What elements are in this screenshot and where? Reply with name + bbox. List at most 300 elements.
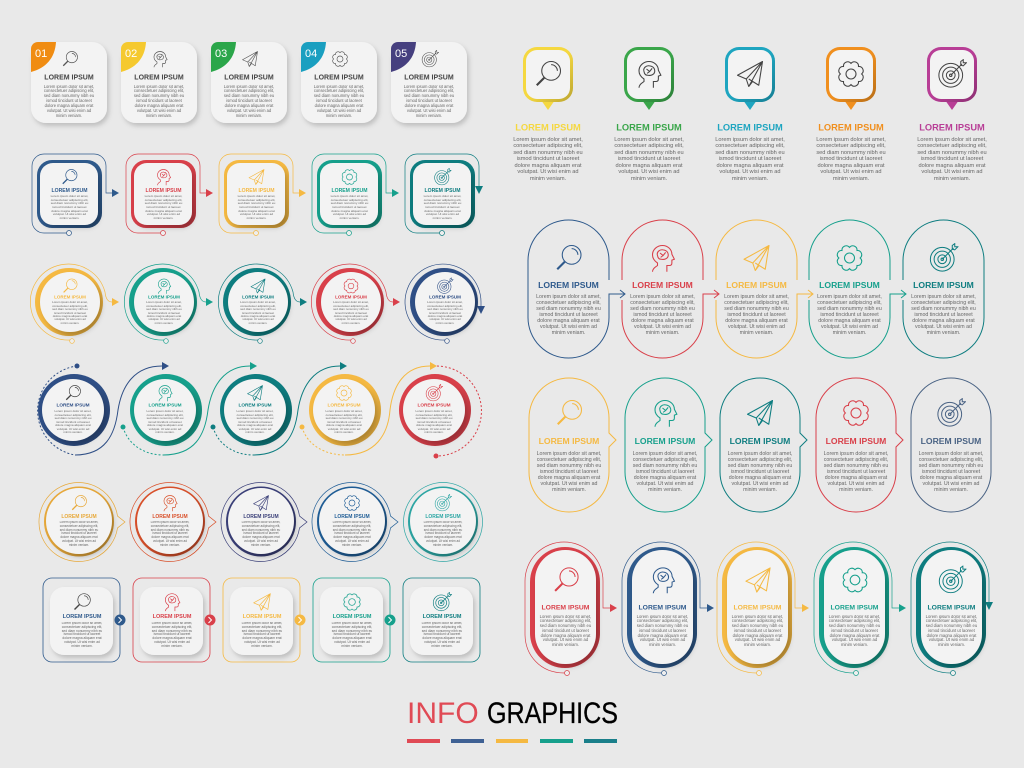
text block: minim veniam. [552,487,586,493]
heading: LOREM IPSUM [425,188,460,194]
icon: gear [337,386,351,400]
text block [389,85,469,121]
text block: ismod tincidunt ut laoreet [820,312,879,318]
text block: sed diam nonummy nibh eu [614,150,684,156]
text block: ismod tincidunt ut laoreet [827,469,885,475]
step 3 indigo [221,483,307,562]
text block: sed diam nonummy nibh eu [926,623,977,628]
icon: paper plane [748,400,772,426]
icon: paper plane [738,62,762,86]
text block: sed diam nonummy nibh eu [55,416,91,420]
text block: consectetuer adipiscing elit, [630,300,695,306]
text block: consectetuer adipiscing elit, [724,300,789,306]
text block: dolore magna aliquam erat [55,423,91,427]
number tab 02: 02 [125,48,137,60]
text block: sed diam nonummy nibh eu [145,201,182,205]
step 4 teal [313,578,396,662]
text block: dolore magna aliquam erat [514,163,582,169]
icon: head [639,62,661,88]
text block: sed diam nonummy nibh eu [422,629,462,633]
text block [228,301,288,326]
text block: dolore magna aliquam erat [424,535,462,539]
text block: consectetuer adipiscing elit, [513,143,583,149]
right row 3: capsules with pointers [529,378,991,512]
text block: Lorem ipsum dolor sit amet, [630,294,695,300]
text block: dolore magna aliquam erat [334,314,368,318]
text block: volutpat. Ut wisi enim ad [244,539,278,543]
text block: sed diam nonummy nibh eu [724,306,789,312]
step 3 yellow [223,578,306,662]
step 5 navy [405,264,485,343]
text block: minim veniam. [69,543,89,547]
text block: ismod tincidunt ut laoreet [327,420,361,424]
text block [911,451,991,495]
text block [415,301,475,326]
icon: magnifier [72,496,86,510]
text block: dolore magna aliquam erat [333,535,371,539]
text block [134,195,194,221]
text block: consectetuer adipiscing elit, [427,304,463,308]
step 2 red [126,154,213,236]
text block [604,137,694,185]
row 4: circles linked by S-curves [38,362,481,458]
text block: minim veniam. [251,644,273,648]
text block: consectetuer adipiscing elit, [326,413,362,417]
text block [413,521,473,549]
step 1 yellow [30,264,119,343]
right row 4: filled capsules with arrows [525,542,993,676]
text block: ismod tincidunt ut laoreet [928,628,975,633]
heading: LOREM IPSUM [148,295,180,300]
step 2 teal [120,362,257,455]
text block: minim veniam. [245,430,265,434]
text block: Lorem ipsum dolor sit amet, [536,294,601,300]
heading: LOREM IPSUM [56,403,90,408]
text block: sed diam nonummy nibh eu [817,306,882,312]
text block: ismod tincidunt ut laoreet [429,311,461,315]
step 3 dark teal [210,362,347,455]
text block: dolore magna aliquam erat [152,636,192,640]
text block: Lorem ipsum dolor sit amet, [513,137,583,143]
heading: LOREM IPSUM [429,295,461,300]
step 2 orange [130,483,216,562]
arrow [250,362,257,370]
text block: sed diam nonummy nibh eu [404,93,454,98]
text block [529,451,609,495]
icon: target [930,244,958,271]
text block: dolore magna aliquam erat [830,633,879,638]
text block [816,451,896,495]
text block: volutpat. Ut wisi enim ad [333,212,366,216]
text block [232,622,292,650]
text block: consectetuer adipiscing elit, [817,300,882,306]
card 02 [119,42,199,123]
text block: consectetuer adipiscing elit, [44,88,94,93]
text block: sed diam nonummy nibh eu [917,150,987,156]
step 1 blue [43,578,126,662]
icon: paper plane [242,52,258,66]
icon: magnifier [557,246,581,269]
icon: target [435,168,451,185]
heading: LOREM IPSUM [146,188,181,194]
icon: magnifier [63,52,78,66]
heading: LOREM IPSUM [404,74,454,82]
text block: sed diam nonummy nibh eu [314,93,364,98]
text block: ismod tincidunt ut laoreet [335,311,367,315]
heading: LOREM IPSUM [734,604,782,612]
icon: magnifier [537,62,560,85]
capsule 2 red [622,220,719,358]
text block: dolore magna aliquam erat [638,633,687,638]
text block: ismod tincidunt ut laoreet [148,311,180,315]
text block: consectetuer adipiscing elit, [51,198,88,202]
step 4 yellow [300,362,437,455]
right row 1: icon badges [503,47,997,185]
text block: volutpat. Ut wisi enim ad [407,108,451,113]
step 4 red [311,264,400,343]
text block: volutpat. Ut wisi enim ad [62,539,96,543]
text block: sed diam nonummy nibh eu [224,93,274,98]
step 1 blue [32,154,119,236]
text block: minim veniam. [160,543,180,547]
text block: volutpat. Ut wisi enim ad [915,324,972,330]
text block: minim veniam. [340,216,359,220]
text block: Lorem ipsum dolor sit amet, [614,137,684,143]
text block [625,451,705,495]
text block: ismod tincidunt ut laoreet [332,205,367,209]
badge 2 green [604,47,694,185]
heading: LOREM IPSUM [921,436,981,446]
text block: dolore magna aliquam erat [422,636,462,640]
text block: ismod tincidunt ut laoreet [153,531,187,535]
text block: volutpat. Ut wisi enim ad [239,427,271,431]
text block: dolore magna aliquam erat [927,633,976,638]
text block: volutpat. Ut wisi enim ad [719,169,781,175]
icon: target [433,592,452,611]
heading: LOREM IPSUM [63,614,102,620]
icon: gear [344,594,360,610]
text block: consectetuer adipiscing elit, [242,524,280,528]
text block: minim veniam. [839,487,873,493]
text block: ismod tincidunt ut laoreet [54,311,86,315]
text block: minim veniam. [154,216,173,220]
text block: consectetuer adipiscing elit, [422,625,462,629]
text block: ismod tincidunt ut laoreet [146,205,181,209]
icon: magnifier [558,400,582,424]
arrow [610,604,617,612]
text block [412,195,472,221]
text block: sed diam nonummy nibh eu [919,463,983,469]
text block: sed diam nonummy nibh eu [537,463,601,469]
icon: target [939,566,966,593]
text block: volutpat. Ut wisi enim ad [227,108,271,113]
text block: sed diam nonummy nibh eu [240,307,276,311]
text block: volutpat. Ut wisi enim ad [832,637,877,642]
text block: minim veniam. [334,430,354,434]
step 4 blue [312,483,398,562]
text block: ismod tincidunt ut laoreet [921,156,983,162]
icon: head [653,568,674,593]
icon: head [158,279,171,294]
text block [320,195,380,221]
text block: consectetuer adipiscing elit, [424,524,462,528]
text block: ismod tincidunt ut laoreet [424,632,460,636]
text block: sed diam nonummy nibh eu [816,150,886,156]
text block: sed diam nonummy nibh eu [332,629,372,633]
heading: LOREM IPSUM [831,604,879,612]
text block [142,622,202,650]
text block [716,294,796,338]
text block: volutpat. Ut wisi enim ad [335,539,369,543]
text block: ismod tincidunt ut laoreet [542,628,589,633]
icon: magnifier [74,594,90,610]
title colour bars [407,739,617,743]
text block: sed diam nonummy nibh eu [536,306,601,312]
text block: consectetuer adipiscing elit, [637,618,688,623]
text block: volutpat. Ut wisi enim ad [317,108,361,113]
title [407,697,618,730]
text block: minim veniam. [247,216,266,220]
icon: target [426,384,443,401]
text block: volutpat. Ut wisi enim ad [64,640,100,644]
text block: Lorem ipsum dolor sit amet, [537,451,601,457]
text block [720,451,800,495]
text block: dolore magna aliquam erat [145,209,182,213]
arrow [300,298,307,306]
heading: LOREM IPSUM [152,514,188,520]
text block: sed diam nonummy nibh eu [152,629,192,633]
text block [904,294,984,338]
heading: LOREM IPSUM [417,403,451,408]
icon: magnifier [66,386,80,400]
icon: head [652,246,674,272]
text block: volutpat. Ut wisi enim ad [335,317,367,321]
arrow [112,298,119,306]
text block: dolore magna aliquam erat [416,423,452,427]
text block: consectetuer adipiscing elit, [633,457,697,463]
text block: minim veniam. [433,216,452,220]
icon: head [165,594,180,611]
text block: consectetuer adipiscing elit, [240,304,276,308]
text block: dolore magna aliquam erat [733,633,782,638]
text block: dolore magna aliquam erat [62,636,102,640]
text block: dolore magna aliquam erat [538,475,600,481]
text block: volutpat. Ut wisi enim ad [821,324,878,330]
icon: paper plane [254,496,268,510]
text block: dolore magna aliquam erat [135,103,183,108]
text block: consectetuer adipiscing elit, [333,304,369,308]
heading: LOREM IPSUM [632,280,693,290]
text block: minim veniam. [326,113,352,118]
text block: consectetuer adipiscing elit, [60,524,98,528]
text block: volutpat. Ut wisi enim ad [148,317,180,321]
text block [530,615,600,651]
text block: dolore magna aliquam erat [237,423,273,427]
text block: ismod tincidunt ut laoreet [719,156,781,162]
text block: Lorem ipsum dolor sit amet, [724,294,789,300]
arrow [162,362,169,370]
icon: gear [839,62,863,86]
text block: minim veniam. [833,330,866,336]
chevron button [384,614,396,626]
arrow [707,604,714,612]
heading: LOREM IPSUM [515,122,581,132]
text block: dolore magna aliquam erat [151,535,189,539]
text block: volutpat. Ut wisi enim ad [921,169,983,175]
icon: head [154,52,167,67]
text block: minim veniam. [433,543,453,547]
text block: ismod tincidunt ut laoreet [56,420,90,424]
heading: LOREM IPSUM [726,280,787,290]
text block: dolore magna aliquam erat [331,209,368,213]
title: GRAPHICS [487,697,618,730]
heading: LOREM IPSUM [54,295,86,300]
text block: dolore magna aliquam erat [428,314,462,318]
text block: ismod tincidunt ut laoreet [539,312,598,318]
text block: sed diam nonummy nibh eu [630,306,695,312]
text block: dolore magna aliquam erat [615,163,683,169]
text block: dolore magna aliquam erat [241,314,275,318]
text block: dolore magna aliquam erat [51,209,88,213]
step 5 teal [404,482,482,562]
heading: LOREM IPSUM [153,614,192,620]
text block: consectetuer adipiscing elit, [152,625,192,629]
text block: dolore magna aliquam erat [332,636,372,640]
capsule 3 yellow [716,220,813,358]
icon: paper plane [746,568,770,592]
heading: LOREM IPSUM [928,604,976,612]
text block [209,85,289,121]
text block: consectetuer adipiscing elit, [537,457,601,463]
heading: LOREM IPSUM [423,614,462,620]
text block [528,294,608,338]
text block: dolore magna aliquam erat [920,475,982,481]
heading: LOREM IPSUM [238,403,272,408]
text block [49,521,109,549]
text block: consectetuer adipiscing elit, [919,457,983,463]
text block: dolore magna aliquam erat [541,633,590,638]
text block: dolore magna aliquam erat [912,318,975,324]
heading: LOREM IPSUM [616,122,682,132]
text block: consectetuer adipiscing elit, [614,143,684,149]
text block [226,195,286,221]
text block: ismod tincidunt ut laoreet [239,205,274,209]
text block: ismod tincidunt ut laoreet [731,469,789,475]
icon: gear [333,52,347,66]
text block: Lorem ipsum dolor sit amet, [715,137,785,143]
text block [404,410,464,436]
text block [916,615,986,651]
capsule 1 yellow [529,378,616,512]
badge 3 cyan [705,47,795,185]
text block: consectetuer adipiscing elit, [237,413,273,417]
text block: minim veniam. [60,216,79,220]
text block: Lorem ipsum dolor sit amet, [917,137,987,143]
arrow [477,306,485,314]
text block: sed diam nonummy nibh eu [333,528,371,532]
text block: volutpat. Ut wisi enim ad [634,324,691,330]
text block: minim veniam. [732,176,768,182]
step 5 red [399,366,481,458]
text block: volutpat. Ut wisi enim ad [923,481,979,487]
heading: LOREM IPSUM [224,74,274,82]
text block: ismod tincidunt ut laoreet [831,628,878,633]
text block: consectetuer adipiscing elit, [829,618,880,623]
text block: ismod tincidunt ut laoreet [636,469,694,475]
text block: consectetuer adipiscing elit, [728,457,792,463]
heading: LOREM IPSUM [730,436,790,446]
text block: Lorem ipsum dolor sit amet, [817,294,882,300]
text block: Lorem ipsum dolor sit amet, [919,451,983,457]
text block: minim veniam. [61,321,79,325]
text block: volutpat. Ut wisi enim ad [53,212,86,216]
text block: ismod tincidunt ut laoreet [540,469,598,475]
text block: sed diam nonummy nibh eu [238,201,275,205]
heading: LOREM IPSUM [134,74,184,82]
text block: volutpat. Ut wisi enim ad [424,640,460,644]
row 6: cards in square frames [43,578,480,662]
text block: consectetuer adipiscing elit, [147,413,183,417]
text block: minim veniam. [744,642,771,647]
text block [231,521,291,549]
text block: sed diam nonummy nibh eu [513,150,583,156]
text block: dolore magna aliquam erat [147,314,181,318]
arrow [475,186,483,194]
step 3 dark teal [218,264,307,343]
icon: target [438,278,453,293]
text block: dolore magna aliquam erat [242,636,282,640]
heading: LOREM IPSUM [239,188,274,194]
text block: volutpat. Ut wisi enim ad [732,481,788,487]
heading: LOREM IPSUM [538,280,599,290]
text block: volutpat. Ut wisi enim ad [242,317,274,321]
step 4 teal [312,154,399,236]
badge 4 orange [806,47,896,185]
heading: LOREM IPSUM [919,122,985,132]
text block: sed diam nonummy nibh eu [52,307,88,311]
text block: volutpat. Ut wisi enim ad [820,169,882,175]
text block: volutpat. Ut wisi enim ad [541,481,597,487]
text block: minim veniam. [416,113,442,118]
text block: ismod tincidunt ut laoreet [426,531,460,535]
text block: consectetuer adipiscing elit, [911,300,976,306]
text block [119,85,199,121]
text block: dolore magna aliquam erat [725,318,788,324]
text block: sed diam nonummy nibh eu [824,463,888,469]
heading: LOREM IPSUM [539,436,599,446]
text block: consectetuer adipiscing elit, [134,88,184,93]
text block: ismod tincidunt ut laoreet [922,469,980,475]
row 3: circles with orbit lines [30,264,485,343]
text block: sed diam nonummy nibh eu [333,307,369,311]
text block: dolore magna aliquam erat [716,163,784,169]
capsule 1 red [525,542,617,676]
text block: minim veniam. [155,321,173,325]
icon: paper plane [248,386,262,400]
text block [314,410,374,436]
text block: consectetuer adipiscing elit, [404,88,454,93]
text block: dolore magna aliquam erat [631,318,694,324]
number tab 05: 05 [395,48,407,60]
text block: sed diam nonummy nibh eu [424,528,462,532]
heading: LOREM IPSUM [61,514,97,520]
icon: magnifier [555,568,578,591]
text block: consectetuer adipiscing elit, [416,413,452,417]
text block: sed diam nonummy nibh eu [427,307,463,311]
text block: consectetuer adipiscing elit, [540,618,591,623]
text block: minim veniam. [155,430,175,434]
capsule 3 dark teal [720,378,807,512]
